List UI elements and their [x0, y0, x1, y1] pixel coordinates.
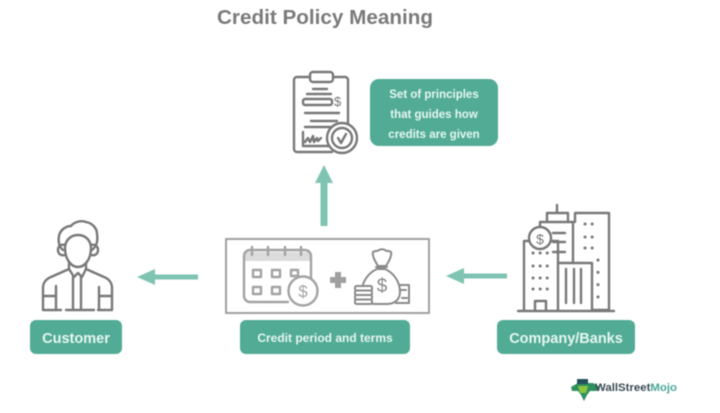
callout: definition: [370, 79, 498, 146]
icon: company buildings: [518, 205, 614, 311]
label: company/banks: Company/Banks: [509, 331, 623, 347]
panel: credit period box: [226, 239, 429, 313]
logo: WallStreetMojo: [571, 379, 677, 401]
label: credit period and terms: [240, 320, 410, 354]
icon: customer: [43, 221, 112, 310]
icon: money bag and coins: [355, 249, 409, 304]
icon: calendar with coin: [244, 247, 318, 306]
callout: definition: credits are given: [388, 129, 480, 141]
icon: calendar with coin: $: [298, 282, 308, 301]
arrow: left from company: [446, 268, 507, 284]
icon: logo mark: [571, 379, 600, 401]
callout: definition: that guides how: [390, 109, 478, 121]
icon: plus: [330, 272, 346, 288]
callout: definition: Set of principles: [389, 89, 479, 101]
label: credit period and terms: Credit period and terms: [257, 331, 393, 345]
label: customer: [30, 320, 122, 354]
title: Credit Policy Meaning: [217, 7, 433, 29]
arrow: left to customer: [137, 269, 198, 285]
icon: company buildings: $: [536, 231, 544, 247]
arrow: up: [315, 165, 333, 226]
icon: clipboard with check: [294, 72, 357, 153]
label: company/banks: [497, 320, 635, 354]
icon: clipboard with check: $: [334, 94, 342, 109]
logo: WallStreetMojo: WallStreetMojo: [595, 382, 677, 394]
label: customer: Customer: [42, 331, 110, 347]
icon: money bag and coins: $: [377, 276, 388, 297]
